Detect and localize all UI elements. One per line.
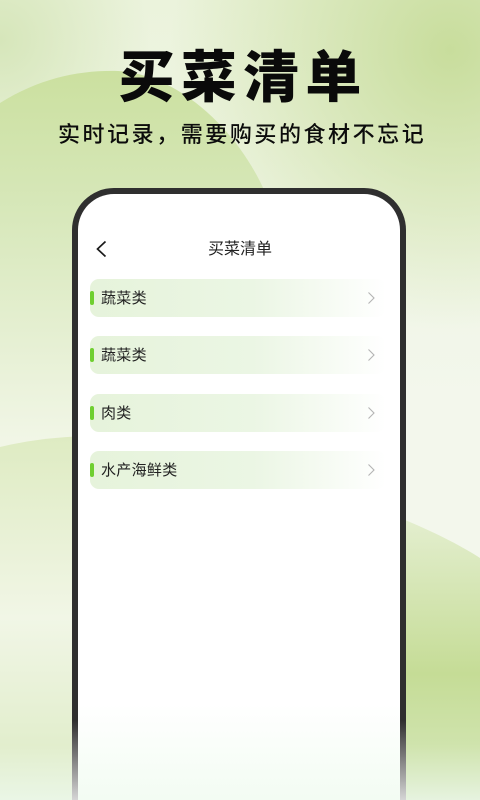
list row: vegetables: 蔬菜类: [101, 290, 147, 307]
list row: vegetables: [90, 279, 386, 317]
subtitle: 实时记录，需要购买的食材不忘记: [58, 122, 426, 147]
list row: seafood: [90, 451, 386, 489]
list row: vegetables 2: 蔬菜类: [101, 347, 147, 364]
icon: back arrow: [96, 240, 106, 258]
screen heading: 买菜清单: [208, 241, 272, 258]
phone frame: [72, 188, 406, 800]
list row: seafood: 水产海鲜类: [101, 462, 178, 479]
title: 买菜清单: [118, 46, 368, 109]
list row: meat: [90, 394, 386, 432]
list row: meat: 肉类: [101, 405, 132, 422]
frame fade at bottom: [72, 724, 406, 800]
list row: vegetables 2: [90, 336, 386, 374]
